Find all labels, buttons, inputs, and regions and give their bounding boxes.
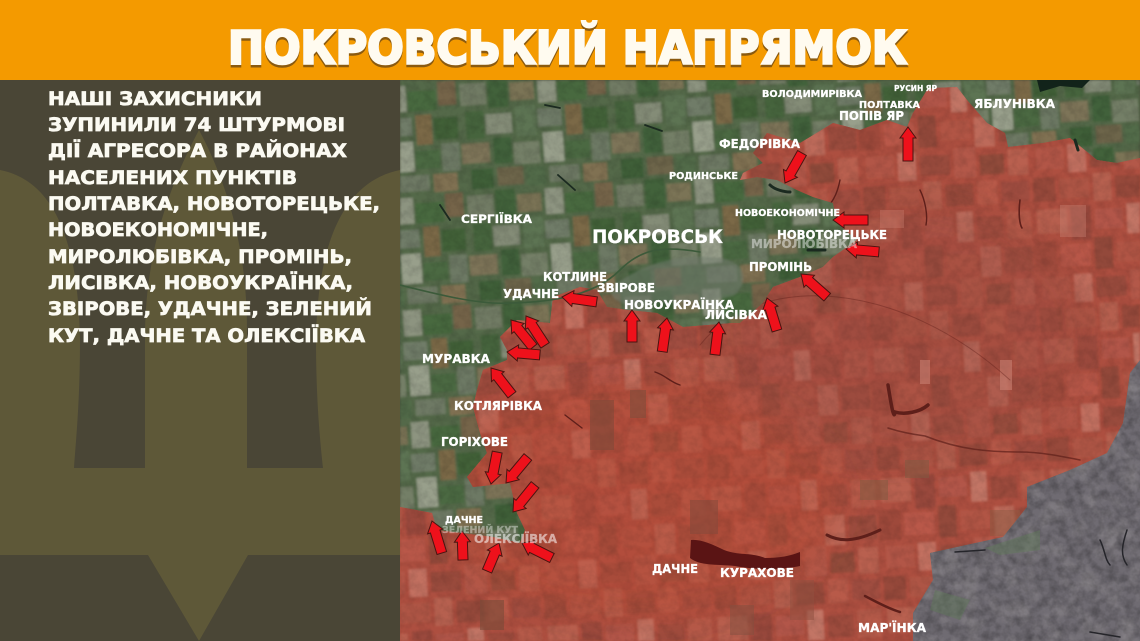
labels: settlement names: ДАЧНЕ [445,515,483,526]
text block: summary of repelled assaults: НАСЕЛЕНИХ ПУНКТІВ [48,167,297,189]
text block: summary of repelled assaults: ЗУПИНИЛИ 74 ШТУРМОВІ [48,114,345,136]
occupied territory: red zone [400,80,1140,641]
water: Kurakhove reservoir [690,540,800,569]
title shadow: ПОКРОВСЬКИЙ НАПРЯМОК [228,23,907,77]
arrows: enemy assault directions [424,127,916,574]
urban area: Pokrovsk [612,257,743,305]
labels: settlement names: ДАЧНЕ [652,562,698,576]
labels: settlement names: ГОРІХОВЕ [441,435,508,449]
labels: settlement names: РОДИНСЬКЕ [669,171,738,182]
text block: summary of repelled assaults: ДІЇ АГРЕСОРА В РАЙОНАХ [48,138,347,162]
labels: settlement names: УДАЧНЕ [503,287,559,301]
text block: summary of repelled assaults: НАШІ ЗАХИСНИКИ [48,88,262,110]
lake: north of Yablunivka [1037,80,1090,92]
labels: settlement names: ПРОМІНЬ [749,260,812,274]
labels: settlement names: НОВОУКРАЇНКА [624,297,735,312]
title: ПОКРОВСЬКИЙ НАПРЯМОК [228,20,907,74]
icon: trident watermark [0,130,400,641]
labels: settlement names: ЗЕЛЕНИЙ КУТ [442,523,518,536]
labels: settlement names: МАР'ЇНКА [858,620,927,635]
labels: settlement names: НОВОТОРЕЦЬКЕ [777,228,887,242]
labels: settlement names [422,84,1056,635]
text block: summary of repelled assaults [48,88,380,347]
labels: settlement names: ЛИСІВКА [705,308,768,322]
text block: summary of repelled assaults: МИРОЛЮБІВКА, ПРОМІНЬ, [48,246,352,268]
water and dark ravines on the free side [400,105,1078,303]
labels: settlement names: ОЛЕКСІЇВКА [474,531,557,546]
text block: summary of repelled assaults: НОВОЕКОНОМІЧНЕ, [48,219,268,241]
labels: settlement names: МУРАВКА [422,352,491,366]
urban area: gray zone [913,360,1140,641]
labels: settlement names: КУРАХОВЕ [720,566,794,580]
labels: settlement names: РУСИН ЯР [894,84,937,93]
labels: settlement names: КОТЛЯРІВКА [454,399,543,413]
labels: settlement names: ПОЛТАВКА [859,100,920,111]
labels: settlement names: КОТЛИНЕ [543,270,607,284]
labels: settlement names: ФЕДОРІВКА [719,137,801,151]
panel: left text panel [0,80,400,641]
labels: settlement names: ЗВІРОВЕ [597,281,655,295]
header: orange title bar [0,0,1140,80]
text block: summary of repelled assaults: ПОЛТАВКА, НОВОТОРЕЦЬКЕ, [48,193,380,215]
text block: summary of repelled assaults: ЗВІРОВЕ, УДАЧНЕ, ЗЕЛЕНИЙ [48,297,372,320]
labels: settlement names: МИРОЛЮБІВКА [751,237,858,251]
labels: settlement names: ПОКРОВСЬК [592,226,723,248]
labels: settlement names: ЯБЛУНІВКА [974,97,1056,111]
river and ravine features [565,180,1080,612]
text block: summary of repelled assaults: КУТ, ДАЧНЕ ТА ОЛЕКСІЇВКА [48,323,365,347]
labels: settlement names: ВОЛОДИМИРІВКА [762,89,863,100]
map: satellite map with occupied territory [400,80,1140,641]
field patches [480,205,1086,635]
labels: settlement names: ПОПІВ ЯР [839,108,904,123]
labels: settlement names: СЕРГІЇВКА [461,211,532,226]
text block: summary of repelled assaults: ЛИСІВКА, НОВОУКРАЇНКА, [48,270,353,294]
labels: settlement names: НОВОЕКОНОМІЧНЕ [735,208,840,219]
